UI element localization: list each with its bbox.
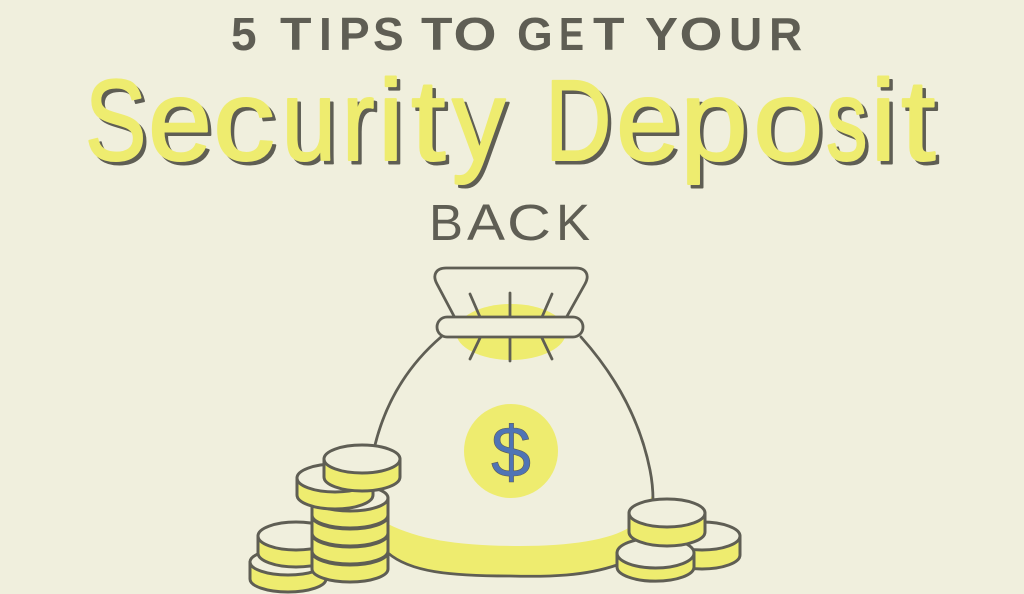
money bag illustration <box>375 268 653 576</box>
title shadow: i <box>874 60 900 188</box>
title fill: e <box>616 57 680 185</box>
title: 5 tips to get your: T <box>421 8 452 60</box>
title fill: D <box>545 57 611 185</box>
title fill: i <box>378 57 404 185</box>
coin <box>312 503 388 546</box>
title fill: o <box>753 57 823 185</box>
title: 5 tips to get your: O <box>680 8 722 60</box>
bag outline <box>375 337 653 576</box>
coin <box>312 521 388 564</box>
badge circle <box>464 404 558 498</box>
title shadow: t <box>904 60 939 188</box>
title: 5 tips to get your: E <box>559 8 584 60</box>
title: 5 tips to get your: P <box>339 8 370 60</box>
bag neck yellow patch <box>456 304 566 360</box>
title: 5 tips to get your: T <box>593 8 624 60</box>
left coin stacks <box>250 445 400 592</box>
bag tie band <box>437 317 583 337</box>
title: 5 tips to get your: O <box>454 8 496 60</box>
title: 5 tips to get your: G <box>517 8 553 60</box>
coin <box>664 522 740 569</box>
title fill: S <box>85 57 146 185</box>
title shadow: e <box>152 60 215 188</box>
title fill: i <box>870 57 896 185</box>
title: 5 tips to get your: T <box>280 8 312 60</box>
bag bottom yellow crescent <box>388 490 653 576</box>
title fill: c <box>213 57 275 185</box>
title shadow: o <box>756 60 827 188</box>
title shadow: e <box>620 60 683 188</box>
coin <box>617 538 694 581</box>
title shadow: c <box>216 60 278 188</box>
coin <box>312 485 388 528</box>
title: 5 tips to get your: Y <box>645 8 678 60</box>
gather marks <box>470 293 552 361</box>
bag top flap <box>435 268 587 318</box>
title fill: t <box>411 57 446 185</box>
title: 5 tips to get your: 5 <box>231 8 257 60</box>
title fill: s <box>826 57 867 185</box>
subtitle: back: K <box>556 194 590 251</box>
title: security deposit <box>85 57 939 188</box>
title: 5 tips to get your: I <box>319 8 332 60</box>
title shadow <box>88 60 939 188</box>
right coin stack <box>617 499 740 581</box>
coin <box>250 549 326 592</box>
title shadow: s <box>830 60 871 188</box>
title: 5 tips to get your: R <box>769 8 802 60</box>
title fill: u <box>282 57 336 185</box>
title shadow: S <box>88 60 150 188</box>
title shadow: D <box>548 60 615 188</box>
coin <box>312 539 388 582</box>
dollar sign: $ <box>491 413 531 493</box>
title shadow: t <box>414 60 449 188</box>
coin <box>297 464 373 509</box>
title fill: r <box>342 57 374 185</box>
subtitle: back: C <box>507 194 551 251</box>
title shadow: p <box>684 60 751 188</box>
title shadow: r <box>346 60 378 188</box>
title fill <box>85 57 936 185</box>
title: 5 tips to get your: U <box>729 8 762 60</box>
subtitle: back: B <box>429 194 463 251</box>
coin <box>324 445 400 491</box>
title fill: y <box>452 57 506 185</box>
coin <box>629 499 705 546</box>
title shadow: y <box>456 60 509 188</box>
dollar badge <box>464 404 558 498</box>
subtitle: back: A <box>467 194 505 251</box>
title fill: t <box>901 57 936 185</box>
coin <box>258 522 334 567</box>
title: 5 tips to get your: S <box>373 8 404 60</box>
title shadow: i <box>382 60 407 188</box>
title fill: e <box>148 57 212 185</box>
title shadow: u <box>285 60 340 188</box>
title fill: p <box>680 57 748 185</box>
